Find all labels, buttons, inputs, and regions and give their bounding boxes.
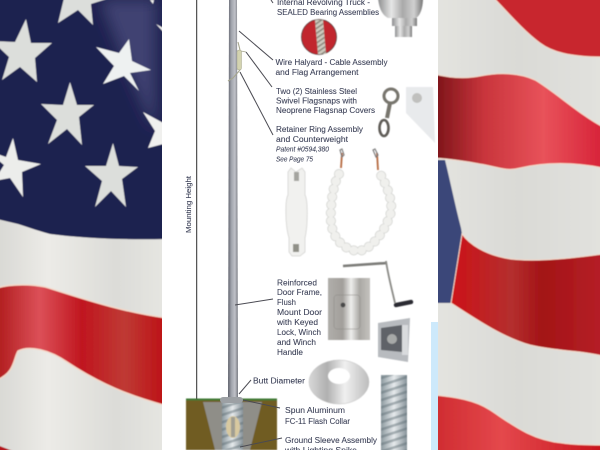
panel: white centre sheet (162, 0, 438, 450)
icon: revolving truck (378, 0, 423, 37)
text: flash collar: Spun Aluminum (285, 405, 345, 415)
text: wire halyard: Wire Halyard - Cable Assembly (276, 57, 388, 67)
text: retainer ring: Retainer Ring Assembly (276, 124, 364, 134)
icon: ground sleeve spiral (381, 375, 407, 450)
panel: pale blue sliver (431, 322, 438, 450)
icon: cable cross section (302, 20, 336, 54)
text: ground sleeve: Ground Sleeve Assembly (285, 435, 378, 445)
text: retainer ring (276, 124, 364, 164)
text: butt diameter: Butt Diameter (253, 376, 305, 386)
icon: neoprene flagsnap cover (406, 87, 435, 143)
icon: swivel flagsnap (380, 89, 398, 136)
icon: winch handle (343, 261, 411, 305)
icon: beaded counterweight rope (331, 149, 391, 251)
text: flash collar (285, 405, 350, 426)
text: wire halyard: and Flag Arrangement (276, 67, 359, 77)
flagpole (220, 0, 243, 403)
ground cross section (186, 398, 277, 450)
text: door frame: with Keyed (276, 317, 318, 327)
text: door frame: Mount Door (277, 307, 322, 317)
flag snaps and halyard on pole (228, 42, 246, 81)
leader lines (235, 0, 282, 447)
icon: flash collar (309, 360, 369, 404)
text: door frame: and Winch (277, 337, 316, 347)
text: door frame (276, 278, 322, 357)
icon: retainer ring (286, 168, 307, 256)
text: revolving truck: SEALED Bearing Assemblies (277, 7, 379, 17)
text: flagsnaps: Neoprene Flagsnap Covers (276, 105, 375, 115)
text: wire halyard (276, 57, 388, 77)
text: door frame: Door Frame, (277, 287, 322, 297)
text: door frame: Handle (277, 347, 303, 357)
text: flagsnaps (276, 86, 375, 115)
text: retainer ring: and Counterweight (276, 134, 349, 144)
mounting height dimension line (196, 0, 198, 401)
text: flash collar: FC-11 Flash Collar (285, 416, 350, 426)
icon: door frame (328, 278, 370, 340)
text: flagsnaps: Two (2) Stainless Steel (276, 86, 357, 96)
text: revolving truck (277, 0, 379, 17)
label: mounting height: Mounting Height (184, 175, 193, 233)
text: retainer ring: See Page 75 (276, 154, 314, 164)
text: door frame: Lock, Winch (277, 327, 321, 337)
text: door frame: Flush (277, 297, 296, 307)
text: flagsnaps: Swivel Flagsnaps with (276, 96, 357, 106)
panel: left flag with stars and stripes (0, 0, 167, 450)
text: door frame: Reinforced (277, 278, 317, 288)
text: ground sleeve (284, 435, 378, 450)
text: retainer ring: Patent #0594,380 (276, 144, 330, 154)
icon: winch (378, 318, 410, 362)
panel: right flag stripes (434, 0, 600, 450)
